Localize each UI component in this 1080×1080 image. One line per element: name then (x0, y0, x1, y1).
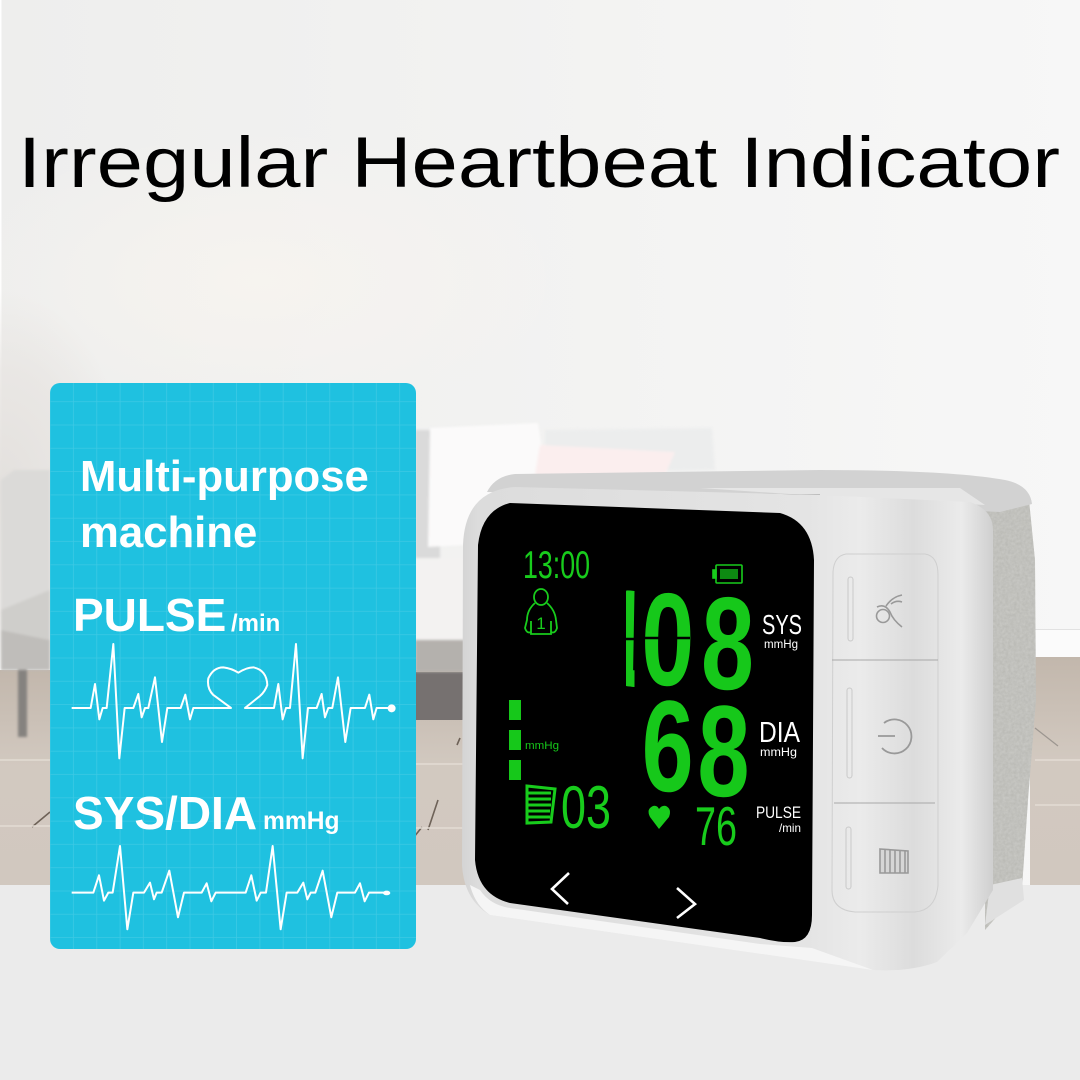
time: 13:00 (523, 544, 590, 587)
display screen (475, 503, 814, 942)
diastolic reading: 8 (696, 678, 751, 825)
device body (462, 487, 993, 970)
bar unit: mmHg (525, 740, 559, 752)
panel heading: machine (80, 508, 257, 557)
diastolic reading: 6 (640, 673, 695, 820)
sys label: SYS (762, 609, 802, 640)
lower bezel highlight (470, 885, 873, 970)
dia label: DIA (759, 717, 801, 749)
diastolic reading (640, 673, 751, 825)
panel heading: Multi-purpose (80, 452, 369, 501)
pulse reading: 76 (695, 795, 737, 857)
device: wrist blood pressure monitor (462, 470, 1036, 970)
memory count: 03 (561, 774, 611, 841)
arrow: previous (552, 873, 569, 904)
pulse ECG trace with heart (72, 644, 396, 758)
icon: user 1: 1 (536, 614, 546, 633)
sys/dia label: SYS/DIA (73, 787, 257, 839)
icon: memory (527, 786, 555, 823)
pulse label: /min (231, 610, 280, 637)
arrow: next (677, 888, 695, 918)
sys unit: mmHg (764, 639, 798, 651)
systolic reading: 8 (700, 570, 755, 718)
systolic reading: 1 (613, 565, 642, 718)
systolic reading (626, 590, 751, 690)
title: Irregular Heartbeat Indicator (18, 124, 1060, 203)
pulse unit: /min (779, 821, 801, 835)
sys/dia label: mmHg (263, 808, 340, 835)
control buttons (832, 554, 938, 912)
segment gaps (622, 638, 690, 639)
wrist cuff (487, 470, 1036, 930)
icon: heart (649, 806, 670, 829)
dia unit: mmHg (760, 747, 797, 759)
systolic reading: 0 (640, 566, 695, 714)
icon: memory button (880, 849, 908, 873)
icon: mode (876, 595, 902, 627)
pressure level bars (509, 700, 521, 780)
table surface (0, 885, 1080, 1080)
panel: multi-purpose machine (50, 383, 416, 949)
pulse label: PULSE (756, 803, 801, 822)
icon: battery (713, 565, 742, 583)
pulse label: PULSE (73, 589, 226, 641)
icon: power (878, 719, 911, 753)
icon: user 1 (525, 589, 557, 634)
blood pressure ECG trace (72, 846, 390, 929)
